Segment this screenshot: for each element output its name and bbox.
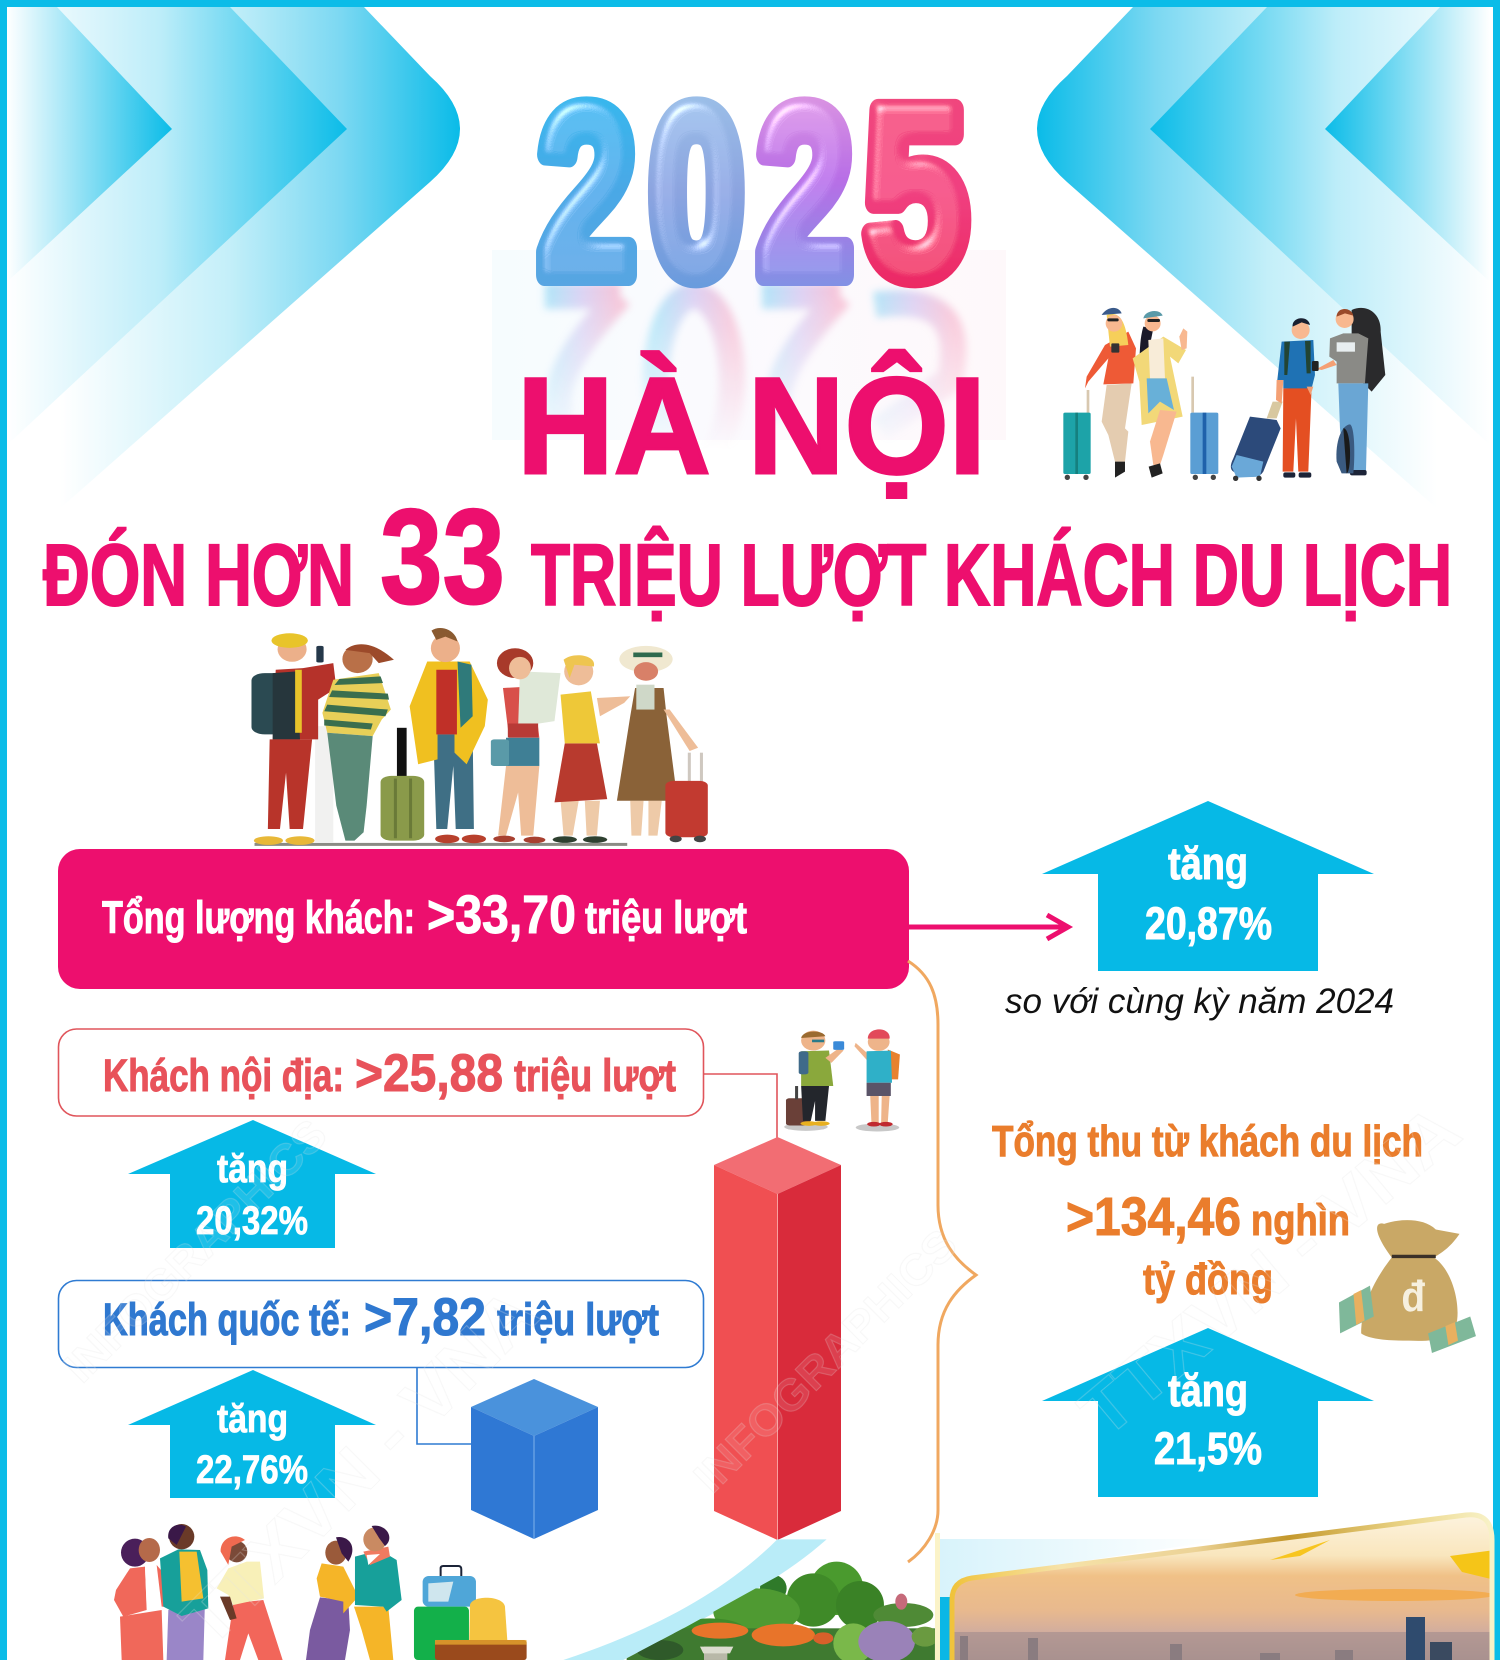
illustration: four travellers with luggage: [1063, 308, 1385, 481]
up arrow: revenue growth 21,5%: 21,5%: [1154, 1423, 1262, 1474]
red suitcase: [665, 753, 708, 842]
connector: domestic to red column: [704, 1074, 777, 1166]
person 4: [306, 1537, 358, 1660]
up arrow: total growth 20,87%: [1042, 801, 1374, 971]
watermark: infographics and agency: INFOGRAPHICS: [684, 1220, 967, 1502]
illustration: group of six tourists: [251, 628, 708, 846]
tourist 1 with backpack: [251, 633, 336, 845]
up arrow: revenue growth 21,5%: tăng: [1168, 1365, 1248, 1416]
year badge: 2025 with reflection: 0: [649, 58, 744, 326]
year badge: 2025 with reflection: 2: [757, 58, 853, 326]
panel: domestic visitors: triệu lượt: [514, 1050, 676, 1101]
up arrow: international growth 22,76%: 22,76%: [196, 1448, 308, 1492]
panel: domestic visitors: Khách nội địa:: [103, 1050, 344, 1101]
brace: orange connector: [908, 961, 976, 1562]
tourist 5 red skirt: [553, 655, 630, 843]
panel: international visitors: >7,82: [364, 1288, 486, 1347]
panel: total visitors: [58, 849, 909, 989]
subtitle: [43, 481, 1452, 632]
panel edge: light backing: [935, 1533, 1230, 1660]
subtitle: 33: [380, 481, 505, 632]
panel: international visitors: Khách quốc tế:: [103, 1294, 351, 1345]
note: compared with 2024: so với cùng kỳ năm 2024: [1005, 982, 1394, 1021]
up arrow: total growth 20,87%: 20,87%: [1145, 898, 1272, 949]
icon: money bag: đ: [1401, 1271, 1425, 1320]
arrow: total to growth: [909, 915, 1068, 939]
text: total revenue: tỷ đồng: [1143, 1255, 1273, 1304]
green suitcase: [381, 728, 424, 841]
up arrow: domestic growth 20,32%: 20,32%: [196, 1199, 308, 1243]
up arrow: international growth 22,76%: tăng: [217, 1397, 288, 1441]
panel: domestic visitors: >25,88: [355, 1044, 503, 1103]
watermark: infographics and agency: TTXVN - VNA: [165, 1273, 553, 1660]
subtitle: ĐÓN HƠN: [43, 527, 354, 624]
swoosh: light blue band: [563, 1539, 827, 1660]
photo: Hanoi greenery: [627, 1562, 943, 1660]
person 2: [160, 1524, 208, 1660]
photo: Hanoi skyline at sunset: [952, 1515, 1495, 1660]
tourist 3 yellow jacket: [410, 628, 488, 843]
up arrow: total growth 20,87%: tăng: [1168, 838, 1248, 889]
person 5: [354, 1526, 402, 1660]
text: total revenue: >134,46: [1066, 1187, 1241, 1247]
text: total revenue: [992, 1117, 1423, 1304]
decoration: right chevrons: [1037, 7, 1490, 535]
watermark: infographics and agency: INFOGRAPHICS: [54, 1110, 337, 1392]
chart: red column domestic: [714, 1137, 841, 1540]
connector: international to blue block: [417, 1368, 472, 1444]
year badge: 2025 with reflection: 5: [864, 58, 968, 326]
watermark: infographics and agency: TTXVN - VNA: [1065, 1090, 1475, 1451]
year badge: 2025 with reflection: [492, 96, 973, 440]
up arrow: international growth 22,76%: [128, 1370, 376, 1498]
panel: domestic visitors: [58, 1029, 704, 1116]
person 3: [217, 1536, 283, 1660]
year badge: 2025 with reflection: 2: [538, 58, 636, 326]
decoration: left chevrons: [7, 7, 460, 535]
text: total revenue: nghìn: [1251, 1196, 1350, 1245]
watermark: infographics and agency: [54, 1090, 1475, 1660]
illustration: group of five people and luggage: [114, 1524, 527, 1660]
up arrow: domestic growth 20,32%: tăng: [217, 1147, 288, 1191]
panel: total visitors: Tổng lượng khách:: [102, 892, 415, 943]
up arrow: revenue growth 21,5%: [1042, 1328, 1374, 1497]
panel: total visitors: triệu lượt: [585, 892, 747, 943]
title: HÀ NỘI: HÀ NỘI: [517, 350, 986, 503]
panel: international visitors: triệu lượt: [497, 1294, 659, 1345]
tourist 4 with map: [491, 648, 561, 843]
icon: money bag: [1339, 1220, 1476, 1353]
up arrow: domestic growth 20,32%: [128, 1120, 376, 1248]
tourist 6 brown dress: [617, 646, 698, 836]
illustration: tourists photographing: [784, 1029, 900, 1131]
panel: international visitors: [58, 1280, 704, 1368]
panel: total visitors: >33,70: [427, 885, 576, 945]
person 1: [114, 1538, 167, 1660]
luggage stack: [414, 1566, 527, 1660]
chart: blue block international: [471, 1379, 598, 1539]
tourist 2 striped sweater: [322, 644, 394, 841]
